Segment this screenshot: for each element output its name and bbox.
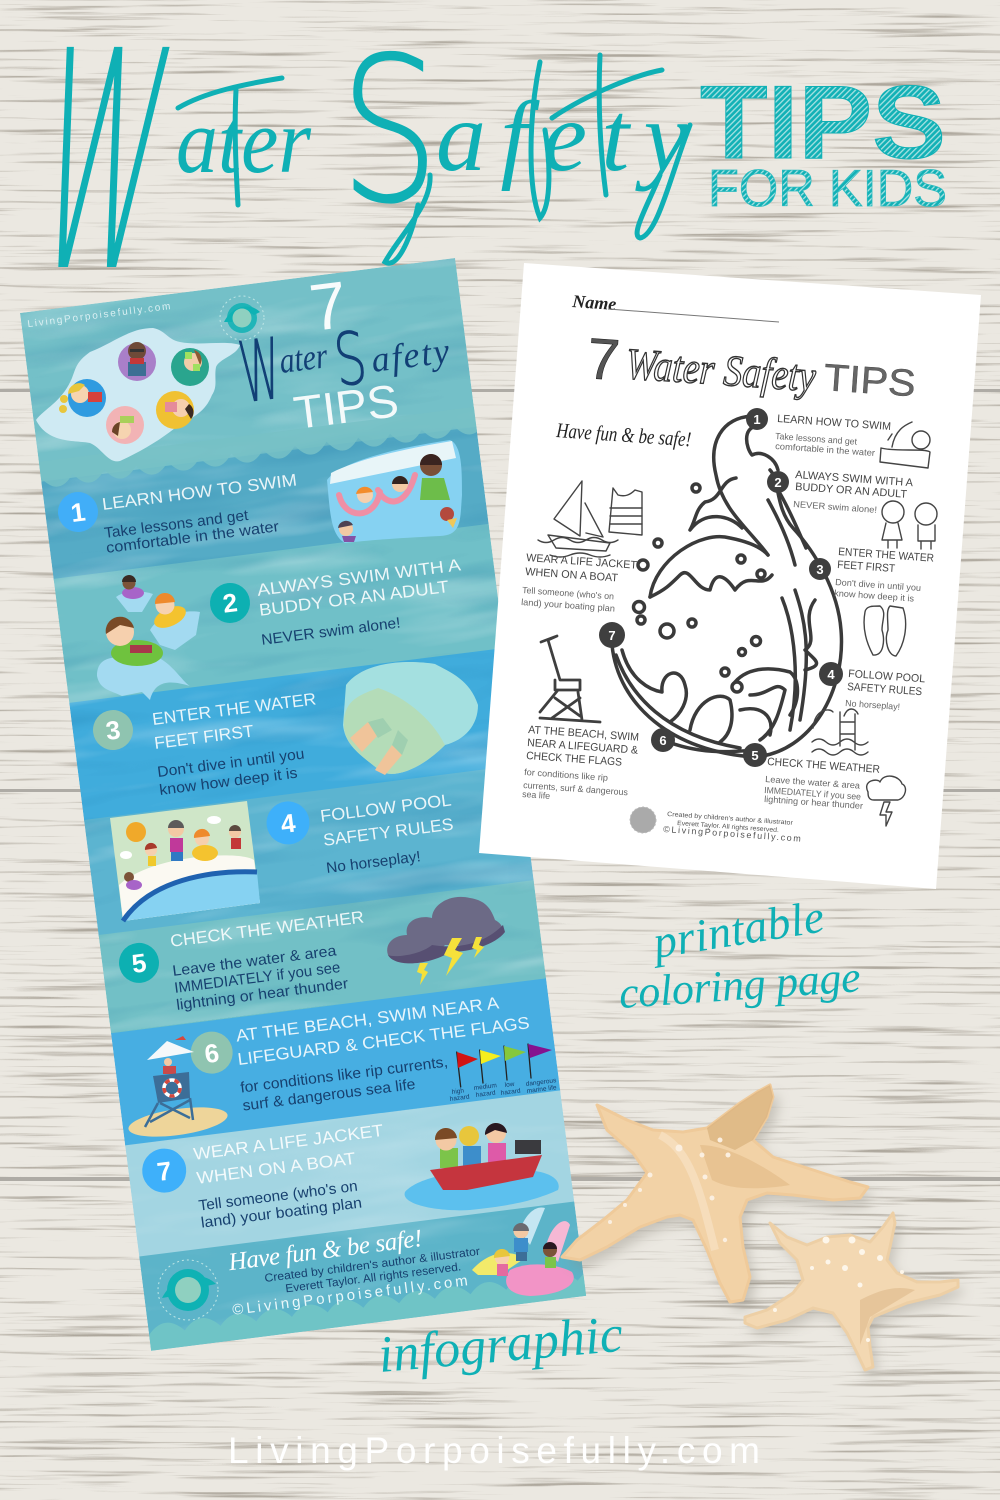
tip 7: 7 xyxy=(155,1155,173,1187)
line-art icons xyxy=(538,422,937,826)
numbered markers: 4 xyxy=(827,667,835,682)
label: infographic: infographic xyxy=(376,1306,625,1384)
footer text: Created by children's author & illustrator xyxy=(264,1246,481,1285)
page credits: ©LivingPorpoisefully.com xyxy=(663,824,801,844)
tip 7: WHEN ON A BOAT xyxy=(195,1149,357,1188)
tip 6: LIFEGUARD & CHECK THE FLAGS xyxy=(236,1013,531,1069)
website footer: LivingPorpoisefully.com xyxy=(228,1430,760,1471)
flag labels: hazard xyxy=(449,1094,470,1103)
tip 3: FEET FIRST xyxy=(153,722,255,753)
flag labels xyxy=(449,1077,557,1103)
coloring page tips: FOLLOW POOL xyxy=(848,668,925,685)
tip 2: BUDDY OR AN ADULT xyxy=(258,577,450,620)
infographic heading: 7 Water Safety TIPS: TIPS xyxy=(291,374,401,439)
illustration: kids in a red boat xyxy=(405,1123,559,1210)
coloring page tips: WHEN ON A BOAT xyxy=(525,566,619,584)
tip 6: 6 xyxy=(203,1038,221,1069)
tip 7: WEAR A LIFE JACKET xyxy=(192,1121,384,1164)
numbered markers: 3 xyxy=(816,562,824,577)
coloring page tips: land) your boating plan xyxy=(521,597,615,614)
heading script: Water Safety: W xyxy=(18,0,189,337)
tip 3 xyxy=(93,693,316,795)
icon: porpoise sun logo xyxy=(220,296,264,340)
tip 7 xyxy=(142,1124,382,1228)
tip 1: Take lessons and get xyxy=(103,507,250,542)
tip 5: 5 xyxy=(130,947,148,979)
flag labels: low xyxy=(504,1081,515,1089)
numbered markers: 2 xyxy=(774,475,782,490)
coloring page tips: Take lessons and get xyxy=(775,431,858,447)
label: printable coloring page xyxy=(617,891,862,1018)
tip 2: NEVER swim alone! xyxy=(260,614,401,649)
tip 7: Tell someone (who's on xyxy=(198,1178,359,1215)
tip 4: SAFETY RULES xyxy=(322,815,454,850)
illustration: kids with pool noodles xyxy=(327,440,462,543)
infographic heading: 7 Water Safety TIPS: afety xyxy=(369,330,451,380)
tip 7: land) your boating plan xyxy=(200,1194,363,1232)
panel: infographic xyxy=(20,254,616,1352)
panel: printable coloring page xyxy=(479,263,981,889)
tip 2: ALWAYS SWIM WITH A xyxy=(256,555,463,600)
tip 6: for conditions like rip currents, xyxy=(239,1054,449,1097)
coloring page tips xyxy=(521,413,934,811)
heading script: Water Safety: S xyxy=(340,16,439,248)
coloring page title: Water Safety xyxy=(624,339,818,401)
heading: TIPS: TIPS xyxy=(700,65,946,181)
coloring page tips: know how deep it is xyxy=(834,588,915,604)
icon: footprints xyxy=(864,606,906,656)
footer text: Everett Taylor. All rights reserved. xyxy=(285,1261,462,1295)
infographic heading: 7 Water Safety TIPS: 7 xyxy=(305,267,351,345)
coloring page title: 7 xyxy=(585,326,622,393)
tagline: Have fun & be safe! xyxy=(555,418,692,451)
tip 1 xyxy=(58,474,296,552)
illustration: feet entering water xyxy=(343,662,478,775)
label: printable coloring page: printable xyxy=(647,891,827,968)
coloring page tips: Tell someone (who's on xyxy=(522,585,614,601)
label: printable coloring page: coloring page xyxy=(617,952,862,1018)
illustration: storm cloud xyxy=(387,897,505,985)
coloring page tips: SAFETY RULES xyxy=(847,681,922,698)
coloring page tips: currents, surf & dangerous xyxy=(523,780,629,797)
flag labels: marine life xyxy=(526,1084,557,1095)
numbered markers: 6 xyxy=(659,733,667,748)
illustration: kids floating in rings xyxy=(36,328,240,461)
footer logo xyxy=(158,1260,218,1320)
illustration: large starfish xyxy=(562,1085,874,1310)
icon: thunder cloud xyxy=(867,776,905,826)
coloring page tips: AT THE BEACH, SWIM xyxy=(528,724,639,744)
tip 3: know how deep it is xyxy=(158,765,298,799)
coloring page tips: WEAR A LIFE JACKET xyxy=(526,552,638,572)
coloring page tips: sea life xyxy=(522,789,550,801)
page credits xyxy=(630,807,801,844)
infographic heading: 7 Water Safety TIPS: S xyxy=(329,315,371,403)
tip 4 xyxy=(266,794,453,873)
tip 3: Don't dive in until you xyxy=(156,746,305,781)
coloring page tips: BUDDY OR AN ADULT xyxy=(795,481,908,501)
page credits: Created by children's author & illustrator xyxy=(667,811,794,827)
coloring page tips: Leave the water & area xyxy=(765,774,860,791)
coloring page tips: for conditions like rip xyxy=(524,767,608,783)
coloring page tips: lightning or hear thunder xyxy=(764,794,863,811)
infographic heading: 7 Water Safety TIPS: W xyxy=(234,320,287,422)
heading script: Water Safety xyxy=(18,0,690,337)
name line: Name xyxy=(571,291,617,314)
illustration: kids on water splashes xyxy=(97,575,200,700)
page credits: Everett Taylor. All rights reserved. xyxy=(677,820,779,834)
icon: lifeguard tower xyxy=(540,636,600,722)
title: Water Safety TIPS for kids xyxy=(18,0,947,337)
flag labels: medium xyxy=(473,1082,497,1092)
header watermark: LivingPorpoisefully.com xyxy=(27,301,171,330)
tip 4: 4 xyxy=(279,808,298,839)
heading script: Water Safety: afety xyxy=(436,81,689,192)
tip 4: No horseplay! xyxy=(325,848,422,877)
coloring page tips: No horseplay! xyxy=(845,698,900,712)
icon: sailboat xyxy=(538,481,618,557)
coloring page tips: ENTER THE WATER xyxy=(838,546,934,565)
tip 5: Leave the water & area xyxy=(171,942,338,980)
tip 3: ENTER THE WATER xyxy=(151,689,317,729)
illustration: kids by pool xyxy=(110,801,260,921)
tip 6: surf & dangerous sea life xyxy=(242,1076,416,1115)
footer text: Have fun & be safe! xyxy=(226,1225,424,1276)
coloring page tips: Don't dive in until you xyxy=(835,577,921,593)
footer text: ©LivingPorpoisefully.com xyxy=(231,1272,469,1319)
flag labels: dangerous xyxy=(525,1077,557,1088)
flag labels: hazard xyxy=(475,1090,496,1099)
heading script: Water Safety: ater xyxy=(176,90,312,192)
coloring page tips: FEET FIRST xyxy=(837,559,896,575)
coloring page tips: comfortable in the water xyxy=(775,441,875,458)
tip 1: comfortable in the water xyxy=(105,518,280,557)
coloring page tips: NEVER swim alone! xyxy=(793,499,877,515)
icon: life jacket xyxy=(609,488,642,535)
numbered markers: 7 xyxy=(608,628,616,643)
coloring page title: TIPS xyxy=(822,357,917,405)
tip 3: 3 xyxy=(104,714,122,746)
illustration: lifeguard tower on beach xyxy=(127,1036,229,1142)
infographic background and text xyxy=(20,254,616,1352)
footer text xyxy=(229,1230,480,1314)
illustration: small starfish xyxy=(745,1213,963,1377)
coloring page tips: ALWAYS SWIM WITH A xyxy=(795,469,914,489)
scalloped wave divider xyxy=(39,406,487,489)
icon: two children xyxy=(882,501,937,549)
coloring page title xyxy=(585,326,917,405)
icon: pool ladder xyxy=(812,709,868,755)
tip 5: lightning or hear thunder xyxy=(175,975,349,1014)
coloring page tips: LEARN HOW TO SWIM xyxy=(777,413,891,433)
tip 4: FOLLOW POOL xyxy=(319,790,452,826)
coloring page tips: NEAR A LIFEGUARD & xyxy=(527,737,639,757)
illustration: hazard flags xyxy=(449,1044,557,1103)
flag labels: hazard xyxy=(500,1088,521,1097)
coloring page tips: CHECK THE FLAGS xyxy=(526,750,622,769)
tip 5: CHECK THE WEATHER xyxy=(169,908,365,951)
infographic heading: 7 Water Safety TIPS xyxy=(234,267,451,439)
footer scallops xyxy=(149,1274,586,1351)
tip 6: AT THE BEACH, SWIM NEAR A xyxy=(235,993,501,1046)
tip 5: IMMEDIATELY if you see xyxy=(173,959,341,997)
tip 1: 1 xyxy=(69,497,87,528)
wave artwork xyxy=(612,416,841,757)
numbered markers xyxy=(599,408,843,767)
name line xyxy=(571,291,779,322)
tip 1: LEARN HOW TO SWIM xyxy=(101,471,298,514)
numbered markers: 1 xyxy=(753,412,761,427)
tip 2 xyxy=(210,559,462,645)
tip 2: 2 xyxy=(221,587,239,619)
coloring page tips: CHECK THE WEATHER xyxy=(767,756,880,776)
icon: swimmer xyxy=(880,422,930,468)
tip 6 xyxy=(190,997,529,1110)
numbered markers: 5 xyxy=(751,748,759,763)
illustration: kids splashing xyxy=(472,1207,574,1296)
tip 5 xyxy=(119,911,364,1012)
heading: FOR KIDS: FOR KIDS xyxy=(708,160,947,218)
coloring page tips: IMMEDIATELY if you see xyxy=(764,785,861,802)
flag labels: high xyxy=(451,1087,465,1096)
infographic heading: 7 Water Safety TIPS: ater xyxy=(277,335,330,381)
